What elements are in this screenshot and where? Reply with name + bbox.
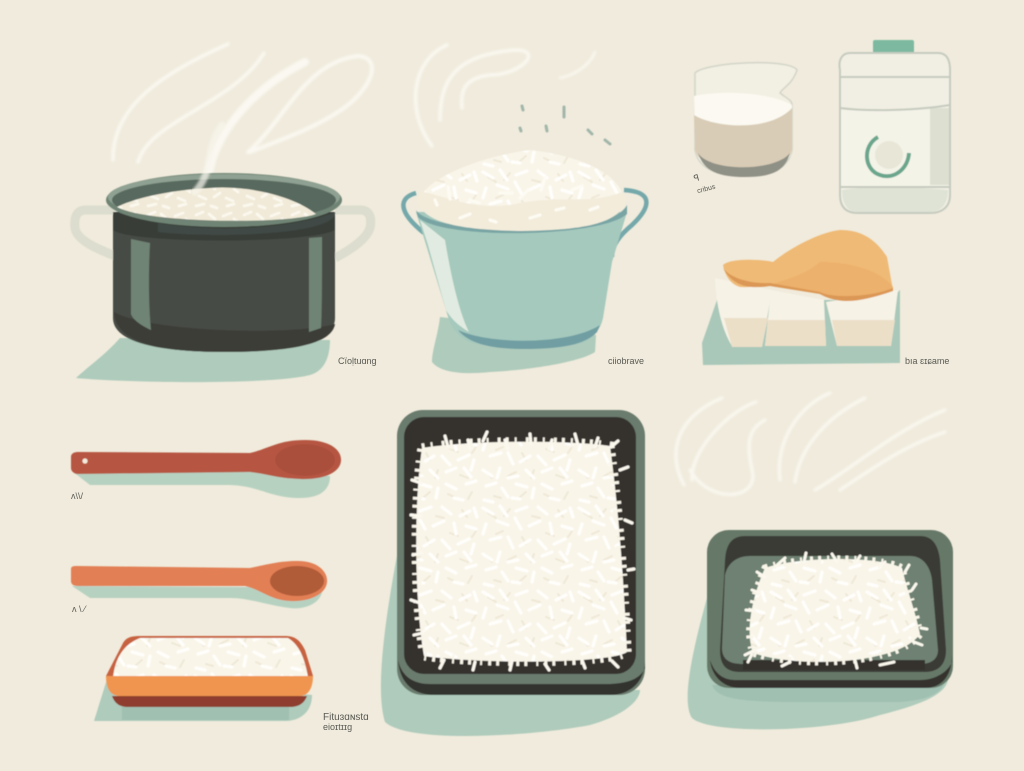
panel: red spoon — [71, 440, 341, 498]
large tray outer — [397, 410, 645, 695]
steam above teal pot — [416, 45, 595, 146]
container label band — [841, 110, 949, 186]
panel: dark pot with rice — [75, 173, 371, 382]
tofu blocks — [715, 278, 772, 347]
dish base — [112, 696, 307, 707]
small tray bottom lip — [710, 655, 952, 688]
red spoon handle — [71, 440, 341, 479]
spoon hole — [82, 458, 88, 464]
small tray shadow — [688, 580, 948, 729]
label: pot: Cïoḷtuɑng — [338, 356, 377, 366]
panel: small dark tray of rice — [688, 530, 953, 729]
label: dish: Fituɜɑɴstɑ — [323, 712, 369, 723]
teal pot shadow — [432, 317, 596, 373]
steam above dark pot — [113, 44, 372, 188]
container body — [839, 53, 950, 213]
pot handles — [75, 210, 371, 258]
large tray bottom lip — [398, 660, 645, 695]
panel: chicken on tofu — [702, 230, 900, 365]
label: orange spoon: ᴧ \ ⁄ — [72, 604, 87, 614]
dish shadow — [94, 676, 312, 721]
label: red spoon: ᴧ\\/ — [71, 491, 84, 501]
jar milk — [694, 93, 792, 170]
flying rice grains — [520, 106, 610, 144]
teal pot body — [416, 212, 627, 348]
small tray loose grains — [745, 553, 927, 668]
rice in pot — [117, 188, 316, 221]
small tray floor — [722, 556, 938, 664]
container dial icon — [867, 137, 909, 176]
panel: storage container — [839, 40, 950, 213]
label: chicken: bıa ɛɪɕame — [905, 356, 949, 366]
small tray inner — [720, 536, 946, 672]
large tray shadow — [381, 550, 640, 736]
panel: small orange dish — [94, 636, 313, 721]
pot base band — [114, 312, 335, 352]
large tray rice — [416, 442, 627, 662]
jar base — [698, 153, 790, 177]
chicken shadow base — [702, 290, 900, 365]
label: jar: ꟼ — [693, 173, 700, 184]
dish front — [106, 676, 313, 696]
dish interior — [106, 636, 313, 676]
chicken — [723, 230, 893, 300]
red spoon shadow — [72, 470, 330, 498]
pot rim — [106, 173, 342, 227]
pot shadow — [76, 338, 330, 382]
label: jar — [693, 169, 717, 195]
orange spoon shadow — [72, 586, 322, 608]
dish rice — [113, 638, 308, 677]
panel: teal pot with rice — [403, 150, 646, 373]
jar liquid — [694, 108, 792, 168]
red spoon bowl — [275, 444, 335, 476]
small tray rice — [750, 559, 920, 662]
container lid cap — [873, 40, 914, 53]
panel: orange spoon — [71, 561, 327, 608]
label: dish — [323, 712, 369, 732]
panel: glass jar — [694, 63, 797, 177]
jar glass — [695, 63, 797, 176]
steam above small tray — [676, 393, 945, 494]
teal pot white stripe — [420, 220, 469, 332]
teal pot base band — [458, 325, 600, 349]
small tray outer — [707, 530, 953, 688]
label: dish: eioɪtɪɪg — [323, 722, 352, 732]
teal pot rim — [416, 205, 627, 233]
rice mound — [417, 150, 626, 231]
large tray loose grains — [411, 432, 634, 670]
large tray inner — [404, 417, 636, 674]
pot highlights — [131, 239, 151, 330]
panel: large dark tray of rice — [381, 410, 645, 736]
teal pot handles — [403, 190, 646, 257]
steam rising from dark pot — [195, 125, 222, 192]
label: jar: cribus — [696, 183, 717, 195]
pot under-rim band — [113, 212, 335, 240]
orange spoon handle — [71, 561, 327, 601]
label: teal pot: ciiobrave — [608, 356, 644, 366]
pot body — [113, 222, 335, 352]
orange spoon bowl — [270, 566, 324, 596]
